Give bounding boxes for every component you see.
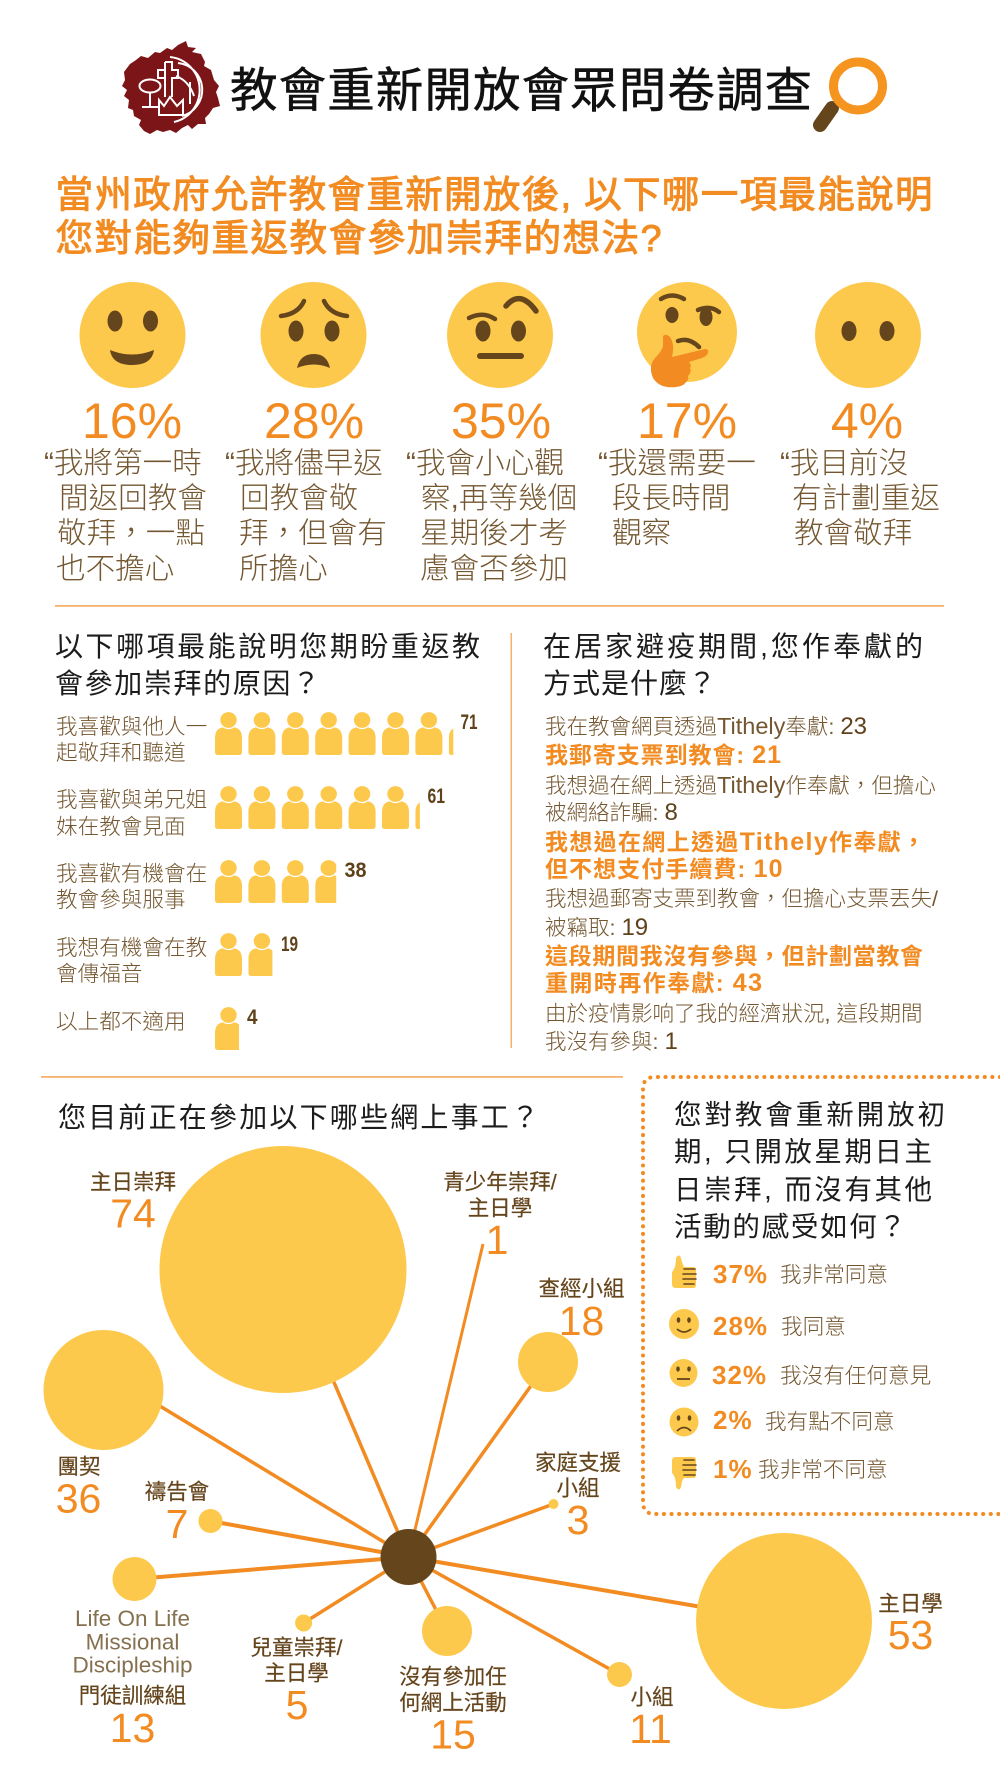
- bubble: 主日崇拜 74: 74: [110, 1190, 156, 1236]
- panel: agreement with Sunday-only reopening: [643, 1077, 1000, 1514]
- item: strongly disagree: [672, 1454, 888, 1490]
- row: 38: [56, 859, 367, 912]
- offering list: 我在教會網頁透過Tithely奉獻: 23: [545, 713, 867, 740]
- row: 38: 我喜歡有機會在: [56, 861, 207, 886]
- answer text 3: [406, 447, 577, 586]
- bubble: 沒有參加 15: [399, 1606, 507, 1758]
- row: 4: [56, 1006, 258, 1050]
- bubble: Life On Life 13: [72, 1557, 193, 1751]
- answer text 3: 星期後才考: [420, 517, 568, 550]
- heading: ministries: 您目前正在參加以下哪些網上事工？: [58, 1102, 539, 1133]
- panel: offering methods: [543, 631, 938, 1055]
- bubble: 團契 36: [44, 1330, 164, 1522]
- bubble: 團契 36: 36: [56, 1476, 101, 1522]
- heading: agreement: [674, 1099, 945, 1242]
- hub: [380, 1529, 436, 1585]
- percentages: [82, 393, 903, 449]
- bubble: 小組 11: 小組: [630, 1686, 674, 1710]
- row: 19: 19: [281, 933, 298, 956]
- bubble: 兒童崇拜 5: 兒童崇拜/: [251, 1636, 343, 1660]
- row: 61: 我喜歡與弟兄姐: [56, 787, 207, 812]
- icon: smiling face: [80, 282, 186, 388]
- bubble: 家庭支援小組 3: 3: [567, 1497, 589, 1543]
- answer text 5: “我目前沒: [780, 447, 908, 480]
- item: neutral: [670, 1359, 931, 1390]
- item: strongly disagree: 我非常不同意: [758, 1457, 888, 1482]
- bubble: 沒有參加 15: 15: [430, 1712, 476, 1758]
- bubble: 查經小組 18: [518, 1277, 625, 1392]
- panel: online ministries bubble chart: [44, 1102, 943, 1758]
- bubble: 家庭支援小組 3: [535, 1451, 621, 1543]
- item: strongly disagree: 1%: [713, 1454, 753, 1484]
- item: strongly agree: 我非常同意: [780, 1262, 888, 1287]
- heading: agreement: 活動的感受如何？: [674, 1211, 906, 1242]
- icon: no-mouth face: [815, 282, 921, 388]
- bubble: 沒有參加 15: 何網上活動: [399, 1691, 507, 1715]
- item: neutral: 我沒有任何意見: [780, 1363, 931, 1388]
- heading: reasons: 以下哪項最能說明您期盼重返教: [55, 631, 480, 662]
- answer text 1: 也不擔心: [56, 552, 174, 586]
- bubble: 青少年崇拜 1: 主日學: [468, 1196, 532, 1220]
- offering list: 我郵寄支票到教會: 21: [545, 741, 781, 769]
- main question heading: [56, 174, 932, 259]
- item: strongly agree: [672, 1256, 888, 1289]
- answer text 2: [225, 447, 387, 586]
- bubble: Life On Life 13: 門徒訓練組: [79, 1684, 186, 1708]
- answer text 1: “我將第一時: [44, 447, 202, 480]
- offering list: 我沒有參與: 1: [545, 1028, 678, 1055]
- bubble: 主日學 53: 53: [888, 1612, 933, 1658]
- item: slightly disagree: 我有點不同意: [765, 1409, 895, 1434]
- bubble: 家庭支援小組 3: 小組: [556, 1476, 600, 1500]
- bubble: 查經小組 18: 查經小組: [538, 1277, 625, 1301]
- heading: agreement: 您對教會重新開放初: [674, 1099, 945, 1130]
- offering list: 被網絡詐騙: 8: [545, 799, 678, 826]
- panel: five reaction results: [44, 282, 940, 586]
- bubble: 青少年崇拜 1: [443, 1170, 557, 1263]
- row: 4: 以上都不適用: [56, 1009, 186, 1034]
- bubble: 主日學 53: 主日學: [878, 1592, 943, 1616]
- row: 71: 71: [460, 711, 478, 734]
- offering list: 這段期間我沒有參與，但計劃當教會: [545, 943, 923, 969]
- answer text 5: 教會敬拜: [794, 517, 912, 550]
- bubble: 主日崇拜 74: [90, 1146, 406, 1393]
- bubble: 兒童崇拜 5: 5: [286, 1682, 308, 1728]
- answer text 3: 慮會否參加: [420, 552, 568, 586]
- item: agree: [669, 1309, 846, 1341]
- title: 教會重新開放會眾問卷調查: [230, 65, 813, 118]
- row: 19: [56, 932, 298, 986]
- answer text 3: 察,再等幾個: [421, 482, 577, 515]
- row: 61: [56, 785, 445, 839]
- answer text 3: “我會小心觀: [406, 447, 564, 480]
- answer text 5: [780, 447, 940, 550]
- answer text 4: 段長時間: [612, 482, 730, 515]
- percentages: 17%: [637, 393, 737, 449]
- answer text 1: 間返回教會: [59, 482, 207, 515]
- bubble: 小組 11: 11: [629, 1706, 672, 1752]
- offering list: [545, 713, 938, 1055]
- bubble: 沒有參加 15: 沒有參加任: [399, 1665, 507, 1689]
- answer text 4: [598, 447, 756, 550]
- bubble: 小組 11: [607, 1662, 674, 1752]
- panel: reasons for returning: [55, 631, 480, 1050]
- icon: skeptical face: [447, 282, 553, 388]
- item: strongly agree: 37%: [713, 1259, 768, 1289]
- bubble: 查經小組 18: 18: [559, 1298, 604, 1344]
- bubble: 青少年崇拜 1: 1: [486, 1217, 508, 1263]
- answer text 5: 有計劃重返: [792, 482, 940, 515]
- percentages: 35%: [451, 393, 551, 449]
- offering list: 由於疫情影响了我的經濟狀況, 這段期間: [545, 1002, 922, 1026]
- offering list: 重開時再作奉獻: 43: [545, 969, 762, 997]
- item: slightly disagree: [670, 1405, 895, 1436]
- main question heading: 您對能夠重返教會參加崇拜的想法?: [56, 217, 662, 259]
- heading: offering: 方式是什麼？: [543, 668, 716, 699]
- heading: reasons: 會參加崇拜的原因？: [55, 668, 320, 699]
- answer text 4: 觀察: [612, 517, 671, 550]
- bubble: 團契 36: 團契: [57, 1455, 101, 1479]
- heading: offering: [543, 631, 923, 699]
- answer text 2: 回教會敬: [240, 482, 358, 515]
- offering list: 我想過在網上透過Tithely作奉獻，但擔心: [545, 772, 936, 798]
- offering list: 我想過在網上透過Tithely作奉獻，: [545, 828, 925, 856]
- bubble: 家庭支援小組 3: 家庭支援: [535, 1451, 621, 1475]
- bubble: 兒童崇拜 5: [251, 1614, 343, 1728]
- answer text 4: “我還需要一: [598, 447, 756, 480]
- icon: thinking face: [637, 282, 737, 387]
- answer text 1: [44, 447, 207, 586]
- percentages: 16%: [82, 393, 182, 449]
- answer text 2: 所擔心: [239, 552, 328, 586]
- row: 71: [56, 711, 478, 765]
- row: 71: 起敬拜和聽道: [56, 740, 186, 765]
- heading: reasons: [55, 631, 480, 699]
- bubble: Life On Life 13: Missional: [86, 1630, 179, 1654]
- bubble: 青少年崇拜 1: 青少年崇拜/: [443, 1170, 557, 1194]
- bubble: Life On Life 13: Discipleship: [72, 1652, 193, 1678]
- bubble: Life On Life 13: 13: [110, 1705, 155, 1751]
- row: 38: 38: [344, 859, 367, 882]
- spokes: [134, 1244, 784, 1674]
- row: 4: 4: [247, 1006, 258, 1029]
- offering list: 但不想支付手續費: 10: [545, 855, 782, 883]
- percentages: 4%: [831, 393, 903, 449]
- item: agree: 28%: [713, 1311, 768, 1341]
- bubble: 兒童崇拜 5: 主日學: [264, 1662, 329, 1686]
- row: 38: 教會參與服事: [56, 887, 186, 912]
- row: 61: 妹在教會見面: [56, 814, 186, 839]
- heading: offering: 在居家避疫期間,您作奉獻的: [543, 631, 923, 662]
- main question heading: 當州政府允許教會重新開放後, 以下哪一項最能說明: [56, 174, 932, 216]
- answer text 2: 拜，但會有: [239, 517, 387, 550]
- icon: worried face: [260, 282, 366, 388]
- row: 61: 61: [428, 785, 445, 808]
- row: 19: 我想有機會在教: [56, 935, 207, 960]
- icon: magnifying glass: [820, 62, 882, 125]
- logo: church emblem on red ink blot: [122, 41, 220, 134]
- bubble: Life On Life 13: Life On Life: [75, 1606, 190, 1631]
- percentages: 28%: [264, 393, 364, 449]
- row: 19: 會傳福音: [56, 961, 142, 986]
- bubble: 禱告會 7: 禱告會: [145, 1480, 209, 1504]
- bubble: 主日崇拜 74: 主日崇拜: [90, 1170, 176, 1194]
- item: agree: 我同意: [781, 1314, 846, 1339]
- row: 71: 我喜歡與他人一: [56, 714, 207, 739]
- dotted frame: [643, 1077, 1000, 1514]
- bubble: 禱告會 7: 7: [166, 1501, 188, 1547]
- answer text 2: “我將儘早返: [225, 447, 383, 480]
- heading: agreement: 期, 只開放星期日主: [674, 1136, 932, 1167]
- item: slightly disagree: 2%: [713, 1405, 753, 1435]
- offering list: 被竊取: 19: [545, 914, 648, 941]
- bubble: 禱告會 7: [145, 1480, 222, 1547]
- heading: agreement: 日崇拜, 而沒有其他: [674, 1174, 932, 1205]
- answer text 1: 敬拜，一點: [57, 517, 205, 550]
- offering list: 我想過郵寄支票到教會，但擔心支票丟失/: [545, 887, 938, 911]
- bubble: 主日學 53: [696, 1533, 943, 1709]
- item: neutral: 32%: [712, 1360, 767, 1390]
